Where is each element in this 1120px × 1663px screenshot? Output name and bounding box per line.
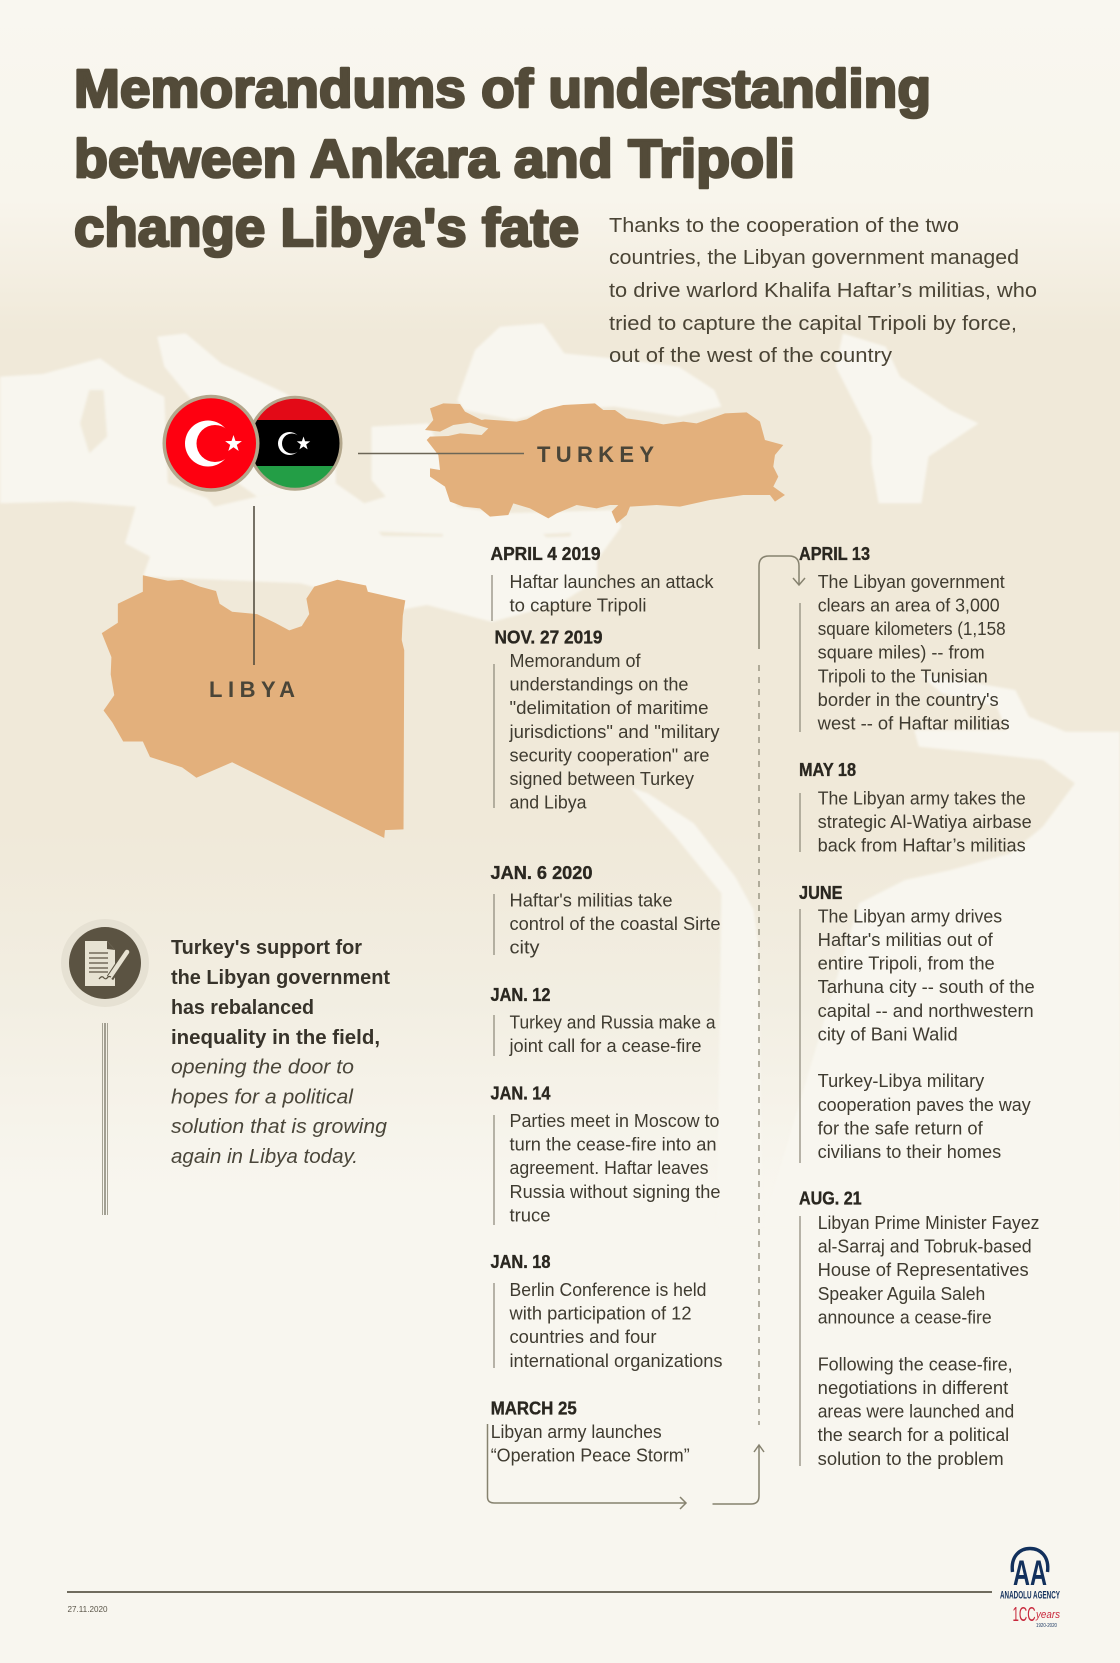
title	[74, 59, 931, 258]
footer: rule and date: 27.11.2020	[68, 1604, 108, 1614]
title: between Ankara and Tripoli	[74, 129, 795, 189]
timeline: April 13: square kilometers (1,158	[818, 619, 1006, 639]
timeline: Nov. 27 2019: "delimitation of maritime	[510, 698, 708, 718]
timeline: Jan. 12	[490, 985, 716, 1056]
text: Turkey's support statement: hopes for a political	[171, 1086, 354, 1108]
text: Turkey's support statement: the Libyan government	[171, 967, 390, 989]
timeline: April 13: west -- of Haftar militias	[817, 714, 1010, 734]
timeline: Nov. 27 2019: jurisdictions" and "military	[508, 722, 720, 742]
timeline: Jan. 14: turn the cease-fire into an	[510, 1135, 716, 1155]
timeline: Nov. 27 2019: security cooperation" are	[510, 745, 710, 765]
logo: Anadolu Agency: years	[1035, 1609, 1060, 1621]
timeline: Jan. 6 2020: city	[510, 938, 540, 958]
flags: Libya and Turkey	[162, 395, 342, 492]
intro text: Thanks to the cooperation of the two	[609, 215, 959, 237]
timeline: Aug. 21: al-Sarraj and Tobruk-based	[818, 1237, 1032, 1257]
timeline: May 18: strategic Al-Watiya airbase	[818, 812, 1032, 832]
logo: Anadolu Agency: 1CC	[1012, 1604, 1036, 1626]
timeline: June: for the safe return of	[818, 1118, 984, 1138]
timeline: Aug. 21: Following the cease-fire,	[818, 1354, 1013, 1374]
map: Turkey	[425, 403, 785, 523]
timeline: Nov. 27 2019: NOV. 27 2019	[494, 628, 602, 648]
timeline: June: JUNE	[799, 883, 842, 903]
timeline: Aug. 21: AUG. 21	[799, 1188, 862, 1208]
timeline: Aug. 21	[799, 1188, 1039, 1469]
timeline: Jan. 6 2020: JAN. 6 2020	[490, 863, 592, 883]
timeline: April 13: border in the country's	[818, 690, 999, 710]
timeline: Nov. 27 2019	[494, 628, 720, 813]
arrow: connector up the timeline to April 13	[712, 556, 805, 1504]
timeline: June: Tarhuna city -- south of the	[818, 977, 1035, 997]
timeline: April 13: clears an area of 3,000	[818, 596, 1000, 616]
timeline: Jan. 12: Turkey and Russia make a	[510, 1012, 716, 1032]
timeline: Jan. 6 2020: control of the coastal Sirte	[510, 914, 720, 934]
title: change Libya's fate	[74, 198, 579, 258]
intro text: tried to capture the capital Tripoli by force,	[609, 313, 1017, 335]
timeline: Aug. 21: solution to the problem	[818, 1449, 1004, 1469]
flag: Libya	[248, 396, 342, 492]
icon: document and pen	[61, 919, 149, 1007]
timeline: Aug. 21: announce a cease-fire	[818, 1307, 992, 1327]
logo: Anadolu Agency: AA	[1013, 1554, 1047, 1593]
timeline: Nov. 27 2019: Memorandum of	[510, 651, 641, 671]
timeline: March 25: MARCH 25	[491, 1399, 577, 1419]
text: Turkey's support statement: opening the door to	[171, 1056, 354, 1078]
timeline: Nov. 27 2019: and Libya	[510, 793, 587, 813]
timeline: May 18: back from Haftar’s militias	[818, 836, 1026, 856]
intro text: to drive warlord Khalifa Haftar’s militias, who	[609, 280, 1037, 302]
timeline: Jan. 12: joint call for a cease-fire	[508, 1036, 702, 1056]
timeline: Aug. 21: House of Representatives	[818, 1260, 1029, 1280]
intro text: out of the west of the country	[609, 345, 892, 367]
timeline: April 13: square miles) -- from	[818, 643, 985, 663]
timeline: Nov. 27 2019: understandings on the	[510, 675, 688, 695]
text: Turkey's support statement: Turkey's support for	[171, 937, 362, 959]
timeline: June: Haftar's militias out of	[818, 930, 994, 950]
timeline: Jan. 6 2020: Haftar's militias take	[510, 890, 672, 910]
timeline: Jan. 18: with participation of 12	[508, 1304, 692, 1324]
timeline: June: The Libyan army drives	[818, 906, 1002, 926]
timeline: April 13: The Libyan government	[818, 572, 1005, 592]
timeline: Jan. 6 2020	[490, 863, 720, 958]
timeline: April 13	[799, 544, 1010, 734]
map: Libya	[102, 575, 405, 838]
timeline: May 18: The Libyan army takes the	[818, 788, 1026, 808]
timeline: Aug. 21: the search for a political	[818, 1425, 1009, 1445]
text: Turkey's support statement: has rebalanced	[171, 997, 314, 1019]
timeline: June: entire Tripoli, from the	[818, 954, 995, 974]
text: Turkey's support statement	[171, 937, 390, 1168]
timeline: March 25: Libyan army launches	[491, 1422, 662, 1442]
timeline: Jan. 14: truce	[510, 1205, 550, 1225]
text: Turkey's support statement: again in Libya today.	[171, 1146, 358, 1168]
timeline: Aug. 21: Speaker Aguila Saleh	[818, 1284, 985, 1304]
flag: Turkey	[162, 395, 260, 492]
text: Turkey's support statement: inequality in the field,	[171, 1027, 380, 1049]
timeline: Jan. 14: JAN. 14	[490, 1084, 550, 1104]
timeline: June: cooperation paves the way	[818, 1095, 1031, 1115]
timeline: Jan. 14: agreement. Haftar leaves	[510, 1158, 708, 1178]
title: Memorandums of understanding	[74, 59, 931, 119]
timeline: Jan. 18: international organizations	[510, 1351, 722, 1371]
intro text	[609, 215, 1037, 367]
timeline: Jan. 14: Parties meet in Moscow to	[510, 1111, 720, 1131]
timeline: March 25	[491, 1399, 690, 1466]
label: Turkey with leader line: TURKEY	[537, 442, 654, 467]
timeline: June	[799, 883, 1035, 1163]
timeline: June: Turkey-Libya military	[818, 1071, 984, 1091]
label: Libya with leader line: LIBYA	[209, 677, 295, 702]
timeline: Aug. 21: areas were launched and	[818, 1402, 1014, 1422]
timeline: Jan. 18	[490, 1252, 722, 1371]
timeline: June: civilians to their homes	[818, 1142, 1001, 1162]
timeline: Nov. 27 2019: signed between Turkey	[510, 769, 694, 789]
timeline: May 18: MAY 18	[799, 760, 856, 780]
decorative vertical double line under icon	[102, 1023, 108, 1215]
timeline: March 25: “Operation Peace Storm”	[491, 1446, 690, 1466]
timeline: June: city of Bani Walid	[818, 1024, 958, 1044]
logo: Anadolu Agency: 1920-2020	[1036, 1623, 1057, 1629]
timeline: April 4 2019: APRIL 4 2019	[490, 544, 600, 564]
logo: Anadolu Agency: ANADOLU AGENCY	[1000, 1590, 1060, 1602]
text: Turkey's support statement: solution that is growing	[171, 1116, 387, 1138]
timeline: Jan. 12: JAN. 12	[490, 985, 550, 1005]
intro text: countries, the Libyan government managed	[609, 247, 1019, 269]
timeline: Jan. 14	[490, 1084, 720, 1225]
timeline: Jan. 18: Berlin Conference is held	[510, 1280, 706, 1300]
timeline: April 4 2019	[490, 544, 714, 621]
timeline: Jan. 18: countries and four	[510, 1327, 656, 1347]
timeline: April 13: Tripoli to the Tunisian	[818, 666, 988, 686]
timeline: April 4 2019: Haftar launches an attack	[510, 572, 714, 592]
timeline: April 13: APRIL 13	[799, 544, 870, 564]
timeline: Jan. 14: Russia without signing the	[510, 1182, 720, 1202]
timeline: Jan. 18: JAN. 18	[490, 1252, 550, 1272]
timeline: May 18	[799, 760, 1032, 856]
timeline: June: capital -- and northwestern	[818, 1001, 1034, 1021]
timeline: April 4 2019: to capture Tripoli	[510, 596, 646, 616]
logo: Anadolu Agency	[1000, 1548, 1060, 1629]
timeline: Aug. 21: negotiations in different	[818, 1378, 1008, 1398]
timeline: Aug. 21: Libyan Prime Minister Fayez	[818, 1213, 1039, 1233]
arrow: March 25 box to next step	[488, 1424, 686, 1509]
